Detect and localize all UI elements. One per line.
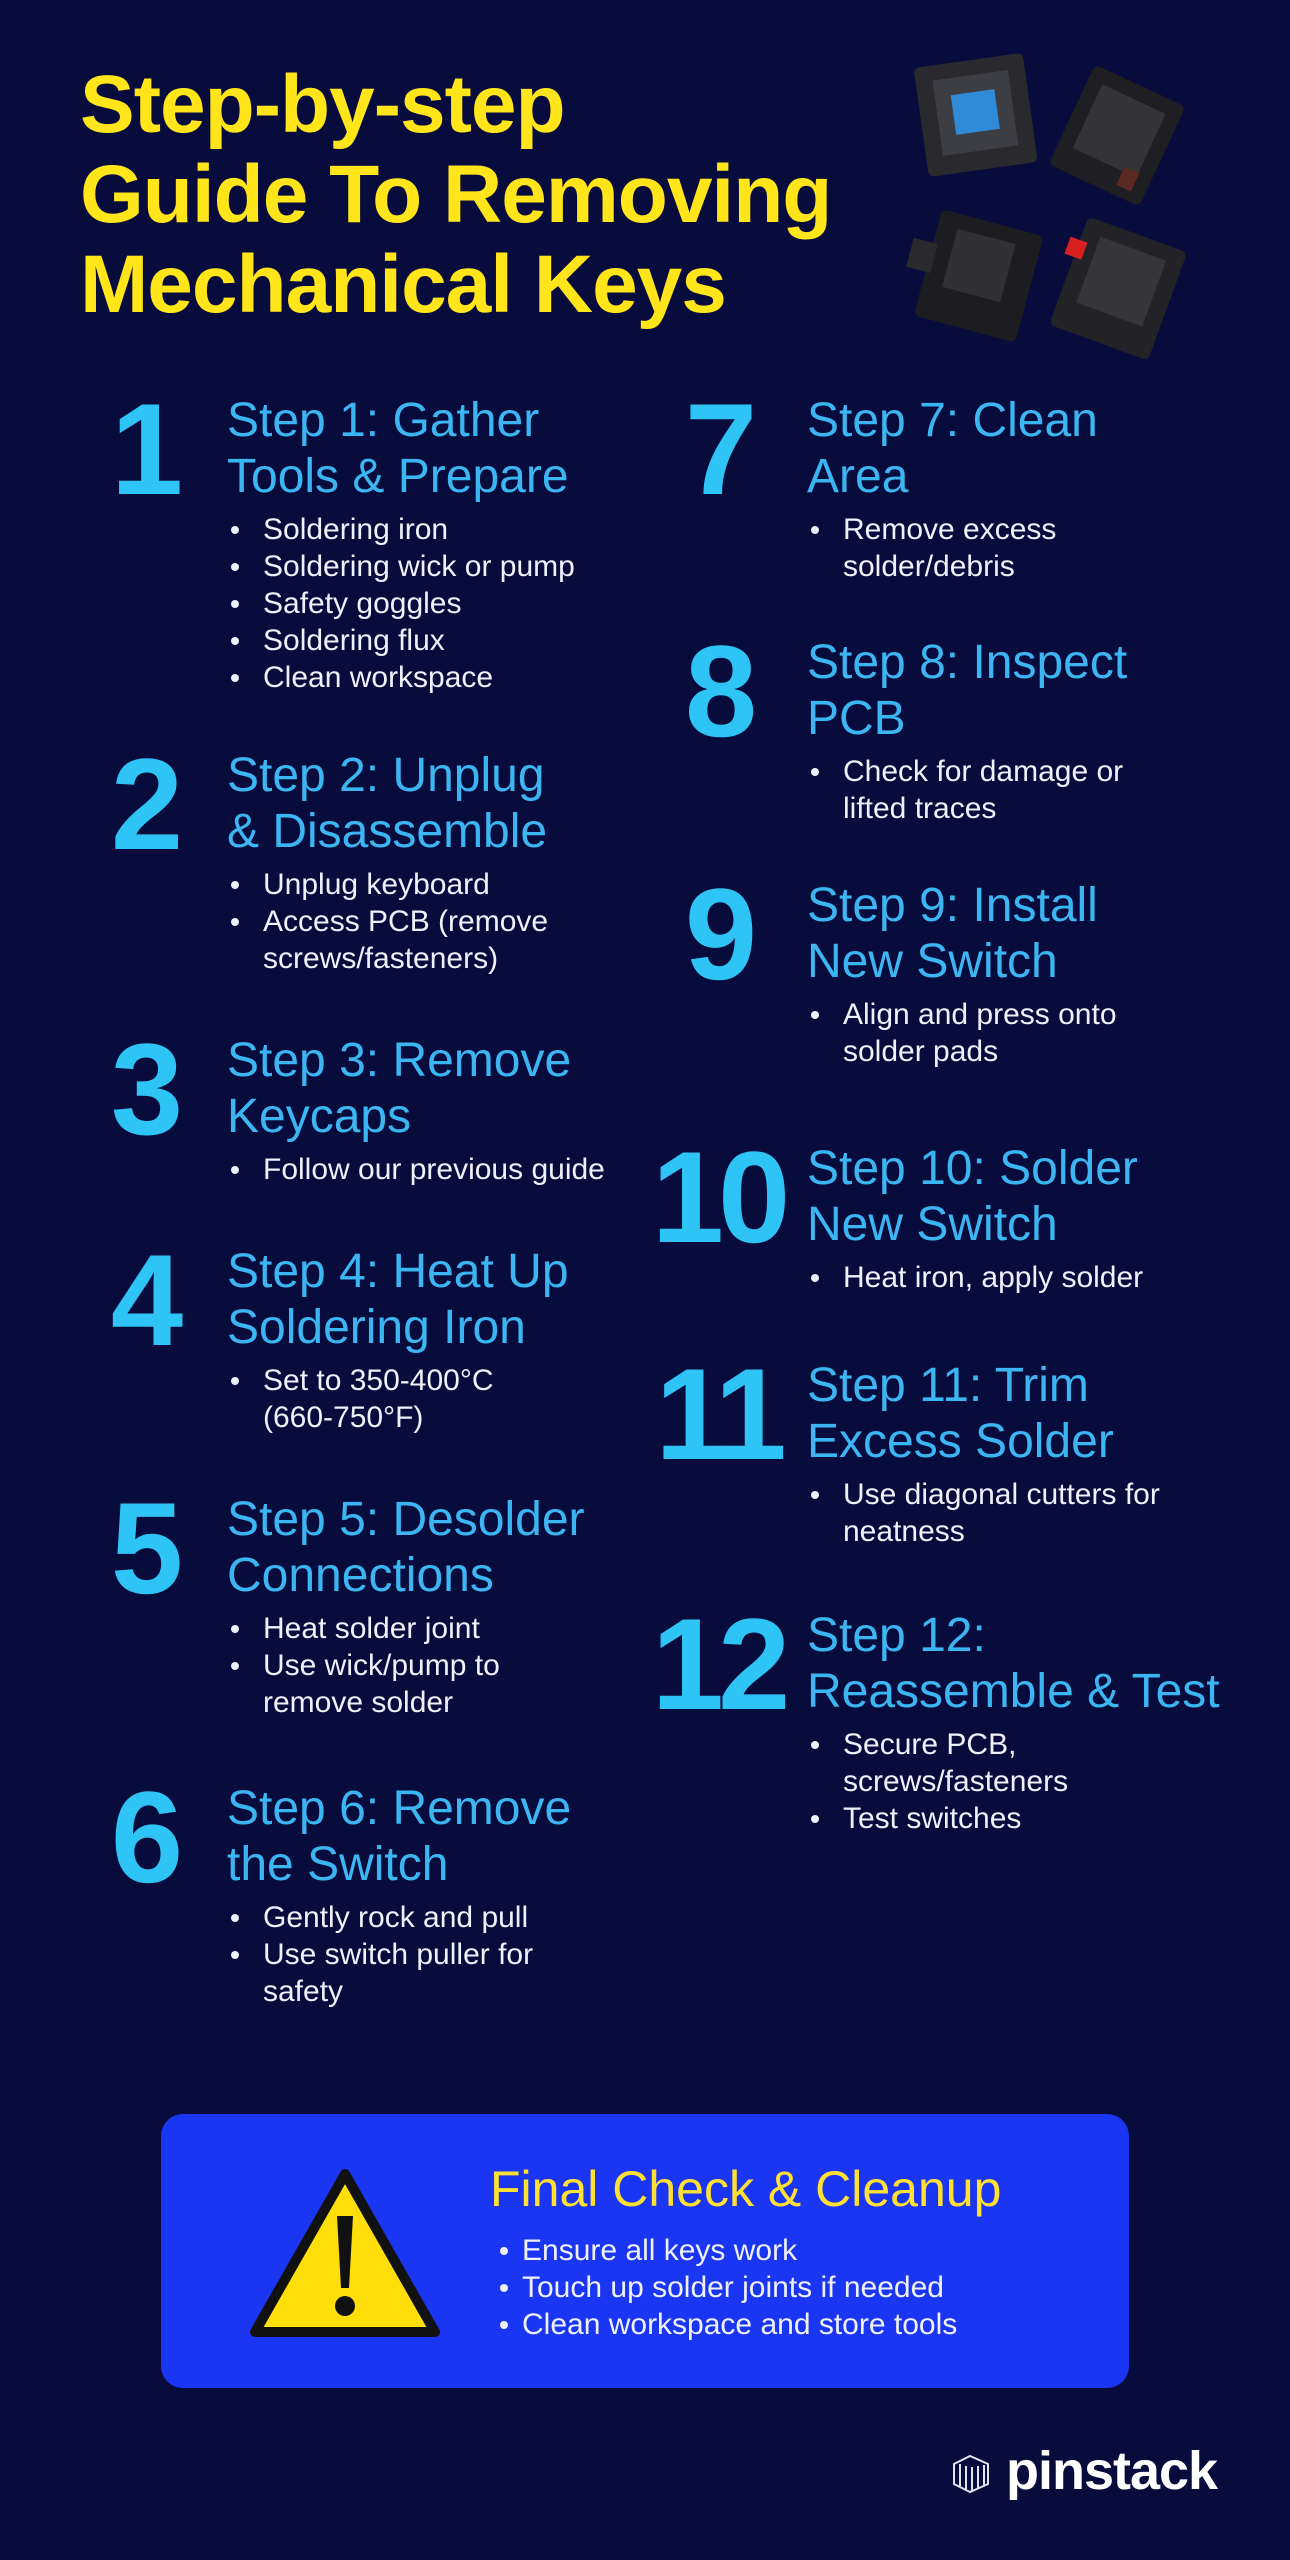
step 8: Step 8: Inspect [807,636,1127,689]
step 11: 11 [655,1341,781,1487]
title [80,59,831,330]
step 9: Step 9: Install [807,879,1098,932]
step 6: Use switch puller for [263,1938,533,1971]
step 3: Step 3: Remove [227,1034,571,1087]
title: Guide To Removing [80,149,831,240]
step 12: Test switches [843,1802,1021,1835]
step 10: New Switch [807,1198,1058,1251]
step 9: New Switch [807,935,1058,988]
step 11: Step 11: Trim [807,1359,1089,1412]
step 9: Align and press onto [843,998,1117,1031]
step 1 [111,376,575,694]
step 1: 1 [111,376,177,522]
step 8: Check for damage or [843,755,1123,788]
step 11: Excess Solder [807,1415,1114,1468]
step 2: Step 2: Unplug [227,749,545,802]
step 4: Soldering Iron [227,1301,526,1354]
step 4: Set to 350-400°C [263,1364,493,1397]
step 2: screws/fasteners) [263,942,498,975]
step 9: solder pads [843,1035,998,1068]
step 7: Remove excess [843,513,1056,546]
step 8 [685,618,1127,825]
step 1: Soldering wick or pump [263,550,575,583]
step 11 [655,1341,1160,1548]
step 10: Heat iron, apply solder [843,1261,1143,1294]
step 6 [111,1764,571,2008]
title: Mechanical Keys [80,239,726,330]
icon: mechanical switches [906,54,1186,359]
step 5: Use wick/pump to [263,1649,500,1682]
step 1: Soldering iron [263,513,448,546]
step 11: neatness [843,1515,965,1548]
step 6: 6 [111,1764,177,1910]
step 4: 4 [111,1227,177,1373]
step 12: Step 12: [807,1609,986,1662]
panel: final check [161,2114,1129,2388]
step 12: screws/fasteners [843,1765,1068,1798]
step 5: remove solder [263,1686,453,1719]
step 12: Secure PCB, [843,1728,1016,1761]
step 12 [652,1591,1220,1835]
bullets: Ensure all keys work [522,2234,797,2267]
text: Clean workspace [263,661,493,694]
step 2: & Disassemble [227,805,547,858]
step 1: Step 1: Gather [227,394,539,447]
step 9: 9 [685,861,751,1007]
step 10: 10 [652,1124,784,1270]
bullets: Clean workspace and store tools [522,2308,957,2341]
step 2: 2 [111,731,177,877]
step 7: solder/debris [843,550,1015,583]
step 10 [652,1124,1143,1294]
bullets: Touch up solder joints if needed [522,2271,944,2304]
step 5: 5 [111,1475,177,1621]
step 6: Gently rock and pull [263,1901,528,1934]
step 5 [111,1475,585,1719]
step 7: Step 7: Clean [807,394,1098,447]
step 4 [111,1227,569,1434]
text: Soldering flux [263,624,445,657]
step 5: Connections [227,1549,494,1602]
step 3 [111,1016,605,1186]
step 6: safety [263,1975,343,2008]
heading: Final Check & Cleanup [490,2161,1001,2217]
step 8: lifted traces [843,792,996,825]
step 8: PCB [807,692,906,745]
step 2: Unplug keyboard [263,868,490,901]
step 1: Safety goggles [263,587,461,620]
step 1: Tools & Prepare [227,450,569,503]
step 3: Follow our previous guide [263,1153,605,1186]
step 3: Keycaps [227,1090,411,1143]
step 5: Step 5: Desolder [227,1493,585,1546]
step 12: Reassemble & Test [807,1665,1220,1718]
icon: warning triangle [250,2169,440,2337]
step 7: Area [807,450,908,503]
title: Step-by-step [80,59,565,150]
step 2: Access PCB (remove [263,905,548,938]
step 9 [685,861,1117,1068]
step 12: 12 [652,1591,784,1737]
step 5: Heat solder joint [263,1612,480,1645]
step 7: 7 [685,376,751,522]
step 4: (660-750°F) [263,1401,423,1434]
step 10: Step 10: Solder [807,1142,1138,1195]
step 4: Step 4: Heat Up [227,1245,569,1298]
step 6: Step 6: Remove [227,1782,571,1835]
step 2 [111,731,548,975]
step 6: the Switch [227,1838,448,1891]
step 3: 3 [111,1016,177,1162]
logo: pinstack: pinstack [1006,2441,1217,2501]
step 8: 8 [685,618,751,764]
step 11: Use diagonal cutters for [843,1478,1160,1511]
bullets [500,2234,957,2341]
step 7 [685,376,1098,583]
